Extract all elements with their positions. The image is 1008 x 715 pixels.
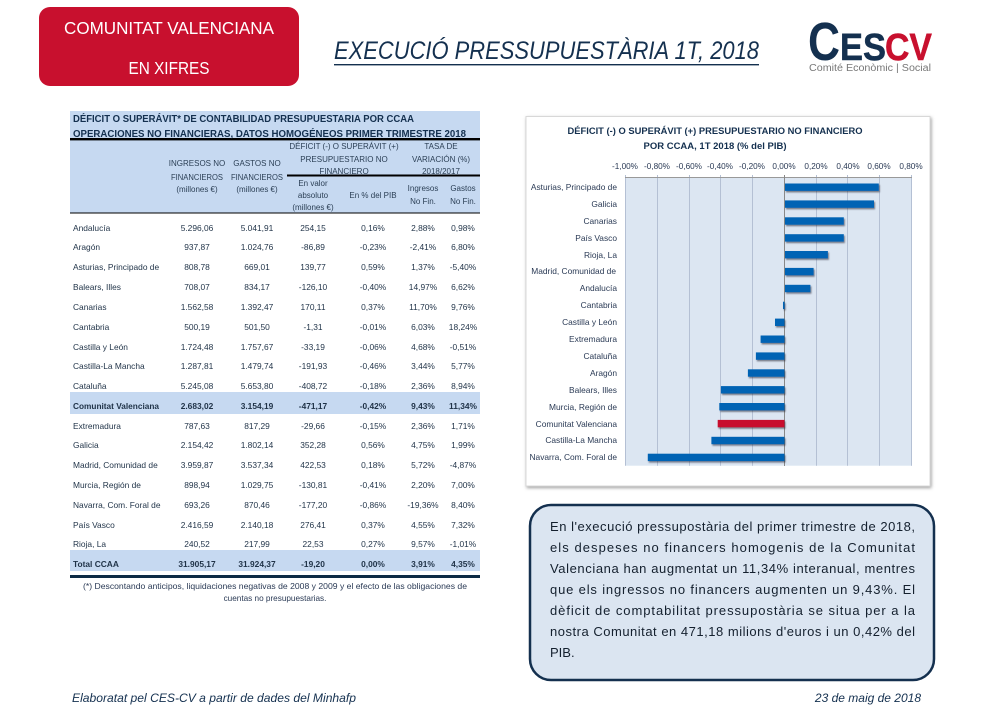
column headings: (millones €) — [176, 185, 218, 194]
column headings: Gastos — [450, 184, 476, 193]
chart title: POR CCAA, 1T 2018 (% del PIB) — [644, 141, 786, 152]
table rows: 3,91% — [411, 559, 435, 569]
panel: commentary text — [530, 505, 934, 680]
table rows: 0,16% — [361, 223, 385, 233]
logo: CES CV — [808, 12, 933, 74]
table rows: Total CCAA — [73, 559, 119, 569]
category labels: Galicia — [591, 199, 617, 209]
table rows: 834,17 — [244, 282, 270, 292]
chart title — [568, 125, 863, 152]
table rows: 0,18% — [361, 460, 385, 470]
table rows: 7,32% — [451, 520, 475, 530]
table rows: -1,31 — [303, 322, 323, 332]
bars — [648, 184, 879, 461]
logo: CES CV: C — [808, 12, 840, 72]
table header band — [70, 111, 480, 214]
table rows: 4,68% — [411, 342, 435, 352]
table rows: Balears, Illes — [73, 282, 121, 292]
table rows: -86,89 — [301, 242, 325, 252]
logo: CES CV: ES — [840, 27, 886, 69]
table rows: 9,76% — [451, 302, 475, 312]
column headings: (millones €) — [236, 185, 278, 194]
table rows: 0,56% — [361, 440, 385, 450]
table rows: 5,72% — [411, 460, 435, 470]
column headings: En valor — [298, 179, 328, 188]
table rows: -0,23% — [360, 242, 387, 252]
table rows: 422,53 — [300, 460, 326, 470]
column headings: 2018/2017 — [422, 167, 460, 176]
table rows: -408,72 — [299, 381, 328, 391]
table rows: 0,37% — [361, 520, 385, 530]
axis labels: -0,20% — [739, 162, 765, 171]
table footnote: (*) Descontando anticipos, liquidaciones negativas de 2008 y 2009 y el efecto de las obligaciones de — [83, 582, 467, 591]
axis labels: 0,40% — [836, 162, 860, 171]
table rows: -4,87% — [450, 460, 477, 470]
table footnote — [83, 582, 467, 603]
panel: commentary text: Valenciana han augmentat un 11,34% interanual, mentres — [550, 561, 916, 576]
category labels: Rioja, La — [584, 250, 617, 260]
column headings: TASA DE — [424, 142, 458, 151]
table rows: Murcia, Región de — [73, 480, 141, 490]
table rows: 22,53 — [303, 539, 324, 549]
table rows: Castilla-La Mancha — [73, 361, 145, 371]
title: EXECUCIÓ PRESSUPUESTÀRIA 1T, 2018 — [334, 36, 759, 65]
table rows: Extremadura — [73, 421, 121, 431]
table rows: 4,75% — [411, 440, 435, 450]
table rows: Cataluña — [73, 381, 107, 391]
table rows: -0,18% — [360, 381, 387, 391]
column headings: PRESUPUESTARIO NO — [300, 155, 388, 164]
axis labels: -0,40% — [707, 162, 733, 171]
table rows: 870,46 — [244, 500, 270, 510]
table rows: Canarias — [73, 302, 107, 312]
table rows: 1.802,14 — [241, 440, 274, 450]
axis labels: 0,20% — [804, 162, 828, 171]
category labels: Aragón — [590, 368, 617, 378]
table rows: 2,36% — [411, 381, 435, 391]
table rows: 4,35% — [451, 559, 475, 569]
category labels: Madrid, Comunidad de — [531, 266, 616, 276]
table rows — [73, 223, 478, 569]
category labels: País Vasco — [575, 233, 617, 243]
table rows: 7,00% — [451, 480, 475, 490]
category labels — [530, 182, 617, 462]
table rows: Rioja, La — [73, 539, 106, 549]
axis labels: 0,00% — [772, 162, 796, 171]
category labels: Castilla y León — [562, 317, 617, 327]
table rows: 1,71% — [451, 421, 475, 431]
header badge: Comunitat Valenciana en xifres: COMUNITAT VALENCIANA — [64, 18, 274, 38]
table rows: 6,03% — [411, 322, 435, 332]
table rows: 1.392,47 — [241, 302, 274, 312]
table rows: 170,11 — [300, 302, 326, 312]
table rows: 2.683,02 — [181, 401, 214, 411]
table rows: -1,01% — [450, 539, 477, 549]
table rows: 1.479,74 — [241, 361, 274, 371]
table rows: -0,51% — [450, 342, 477, 352]
logo: CES CV: CV — [885, 27, 933, 69]
table rows: 2.140,18 — [241, 520, 274, 530]
table: déficit o superávit por CCAA — [70, 111, 480, 603]
table rows: 1.757,67 — [241, 342, 274, 352]
table rows: -0,46% — [360, 361, 387, 371]
table rows: 2,88% — [411, 223, 435, 233]
header badge: Comunitat Valenciana en xifres: EN XIFRES — [128, 58, 210, 78]
table rows: -0,06% — [360, 342, 387, 352]
category labels: Navarra, Com. Foral de — [530, 452, 617, 462]
table rows: Galicia — [73, 440, 99, 450]
table rows: -126,10 — [299, 282, 328, 292]
table rows: -29,66 — [301, 421, 325, 431]
table rows: 14,97% — [409, 282, 438, 292]
table rows: 31.924,37 — [238, 559, 276, 569]
panel: commentary text: En l'execució pressupostària del primer trimestre de 2018, — [550, 519, 915, 534]
axis labels: 0,60% — [867, 162, 891, 171]
table rows: Asturias, Principado de — [73, 262, 159, 272]
column headings: (millones €) — [292, 203, 334, 212]
table rows: 669,01 — [244, 262, 270, 272]
category labels: Cantabria — [581, 300, 617, 310]
table rows: 0,37% — [361, 302, 385, 312]
table rows: 787,63 — [184, 421, 210, 431]
panel: bar chart — [526, 116, 930, 486]
category labels: Murcia, Región de — [549, 402, 617, 412]
table rows: 501,50 — [244, 322, 270, 332]
column headings: DÉFICIT (-) O SUPERÁVIT (+) — [289, 142, 399, 151]
axis labels: -0,80% — [644, 162, 670, 171]
table rows: 11,70% — [409, 302, 437, 312]
table rows: 8,94% — [451, 381, 475, 391]
category labels: Comunitat Valenciana — [536, 419, 617, 429]
column headings: No Fin. — [410, 197, 436, 206]
category labels: Balears, Illes — [569, 385, 617, 395]
table rows: 2,20% — [411, 480, 435, 490]
table rows: 0,59% — [361, 262, 385, 272]
category labels: Canarias — [583, 216, 617, 226]
table rows: -19,20 — [301, 559, 325, 569]
table rows: 11,34% — [449, 401, 478, 411]
table rows: 18,24% — [449, 322, 478, 332]
column headings: absoluto — [298, 191, 329, 200]
footer date: 23 de maig de 2018 — [814, 691, 921, 705]
table rows: 1.287,81 — [181, 361, 214, 371]
panel: commentary text: que els ingressos no financers augmenten un 9,43%. El — [550, 582, 915, 597]
table rows: 1.562,58 — [181, 302, 214, 312]
column headings: VARIACIÓN (%) — [412, 155, 470, 164]
table rows: 5,77% — [451, 361, 475, 371]
category labels: Cataluña — [583, 351, 617, 361]
table rows: -471,17 — [299, 401, 328, 411]
table rows: 3.959,87 — [181, 460, 214, 470]
table rows: 6,80% — [451, 242, 475, 252]
table rows: 2.416,59 — [181, 520, 214, 530]
table rows: 240,52 — [184, 539, 210, 549]
plot area and gridlines — [625, 175, 912, 466]
table rows: 5.653,80 — [241, 381, 274, 391]
table footnote: cuentas no presupuestarias. — [224, 594, 326, 603]
column headings: GASTOS NO — [233, 159, 281, 168]
table rows: 1.024,76 — [241, 242, 274, 252]
table rows: -130,81 — [299, 480, 328, 490]
table rows: 937,87 — [184, 242, 210, 252]
column headings: FINANCIERO — [319, 167, 369, 176]
panel: commentary text: nostra Comunitat en 471,18 milions d'euros i un 0,42% del — [550, 624, 915, 639]
table rows: -5,40% — [450, 262, 477, 272]
table rows: 2,36% — [411, 421, 435, 431]
column headings: INGRESOS NO — [169, 159, 225, 168]
table rows: 0,00% — [361, 559, 385, 569]
table rows: -33,19 — [301, 342, 325, 352]
table rows: 9,43% — [411, 401, 435, 411]
table rows: 1.029,75 — [241, 480, 274, 490]
panel: commentary text: PIB. — [550, 645, 575, 660]
chart title: DÉFICIT (-) O SUPERÁVIT (+) PRESUPUESTARIO NO FINANCIERO — [568, 125, 863, 137]
table rows: 276,41 — [300, 520, 326, 530]
table rows: 3,44% — [411, 361, 435, 371]
table rows: 3.154,19 — [241, 401, 274, 411]
axis labels — [612, 162, 923, 171]
table rows: Andalucía — [73, 223, 111, 233]
footer source: Elaboratat pel CES-CV a partir de dades del Minhafp — [72, 691, 356, 705]
table rows: 5.041,91 — [241, 223, 274, 233]
table rows: -0,42% — [360, 401, 387, 411]
table rows: -0,41% — [360, 480, 387, 490]
table rows: -0,40% — [360, 282, 387, 292]
table rows: 898,94 — [184, 480, 210, 490]
logo: CES CV: Comité Econòmic | Social — [809, 63, 931, 74]
column headings — [169, 142, 476, 212]
table rows: -2,41% — [410, 242, 437, 252]
table rows: 1.724,48 — [181, 342, 214, 352]
table rows: 2.154,42 — [181, 440, 214, 450]
table rows: 817,29 — [244, 421, 270, 431]
panel: commentary text: dèficit de comptabilitat pressupostària se situa per a la — [550, 603, 916, 618]
category labels: Extremadura — [569, 334, 617, 344]
table rows: 6,62% — [451, 282, 475, 292]
column headings: FINANCIEROS — [171, 173, 223, 182]
table rows: Cantabria — [73, 322, 110, 332]
table rows: 0,98% — [451, 223, 475, 233]
table rows: 254,15 — [300, 223, 326, 233]
axis labels: 0,80% — [899, 162, 923, 171]
table rows: -0,15% — [360, 421, 387, 431]
table rows: Madrid, Comunidad de — [73, 460, 158, 470]
table rows: 693,26 — [184, 500, 210, 510]
table rows: 8,40% — [451, 500, 475, 510]
table rows: 500,19 — [184, 322, 210, 332]
category labels: Andalucía — [580, 283, 617, 293]
column headings: No Fin. — [450, 197, 476, 206]
table rows: 31.905,17 — [178, 559, 216, 569]
table rows: -19,36% — [407, 500, 439, 510]
table rows: Aragón — [73, 242, 100, 252]
column headings: En % del PIB — [349, 191, 397, 200]
table rows: 1,37% — [411, 262, 435, 272]
table rows: -0,86% — [360, 500, 387, 510]
table rows: 139,77 — [300, 262, 326, 272]
table rows: -191,93 — [299, 361, 328, 371]
table rows: 0,27% — [361, 539, 385, 549]
table header band: OPERACIONES NO FINANCIERAS, DATOS HOMOGÉNEOS PRIMER TRIMESTRE 2018 — [73, 127, 466, 140]
table rows: -177,20 — [299, 500, 328, 510]
table rows: 1,99% — [451, 440, 475, 450]
table rows: 352,28 — [300, 440, 326, 450]
table rows: 708,07 — [184, 282, 210, 292]
table rows: 4,55% — [411, 520, 435, 530]
table rows: 217,99 — [244, 539, 270, 549]
axis labels: -1,00% — [612, 162, 638, 171]
highlighted row bands — [70, 392, 480, 578]
table rows: Comunitat Valenciana — [73, 401, 159, 411]
table rows: 5.296,06 — [181, 223, 214, 233]
header badge: Comunitat Valenciana en xifres — [39, 7, 299, 86]
column headings: FINANCIEROS — [231, 173, 283, 182]
category labels: Asturias, Principado de — [531, 182, 617, 192]
table header band: DÉFICIT O SUPERÁVIT* DE CONTABILIDAD PRESUPUESTARIA POR CCAA — [73, 112, 415, 125]
table rows: 5.245,08 — [181, 381, 214, 391]
table rows: Navarra, Com. Foral de — [73, 500, 161, 510]
category labels: Castilla-La Mancha — [545, 435, 617, 445]
table rows: País Vasco — [73, 520, 115, 530]
axis labels: -0,60% — [676, 162, 702, 171]
table rows: 9,57% — [411, 539, 435, 549]
column headings: Ingresos — [408, 184, 438, 193]
table rows: -0,01% — [360, 322, 387, 332]
table rows: 808,78 — [184, 262, 210, 272]
panel: commentary text: els despeses no financers homogenis de la Comunitat — [550, 540, 915, 555]
table rows: Castilla y León — [73, 342, 128, 352]
table rows: 3.537,34 — [241, 460, 274, 470]
